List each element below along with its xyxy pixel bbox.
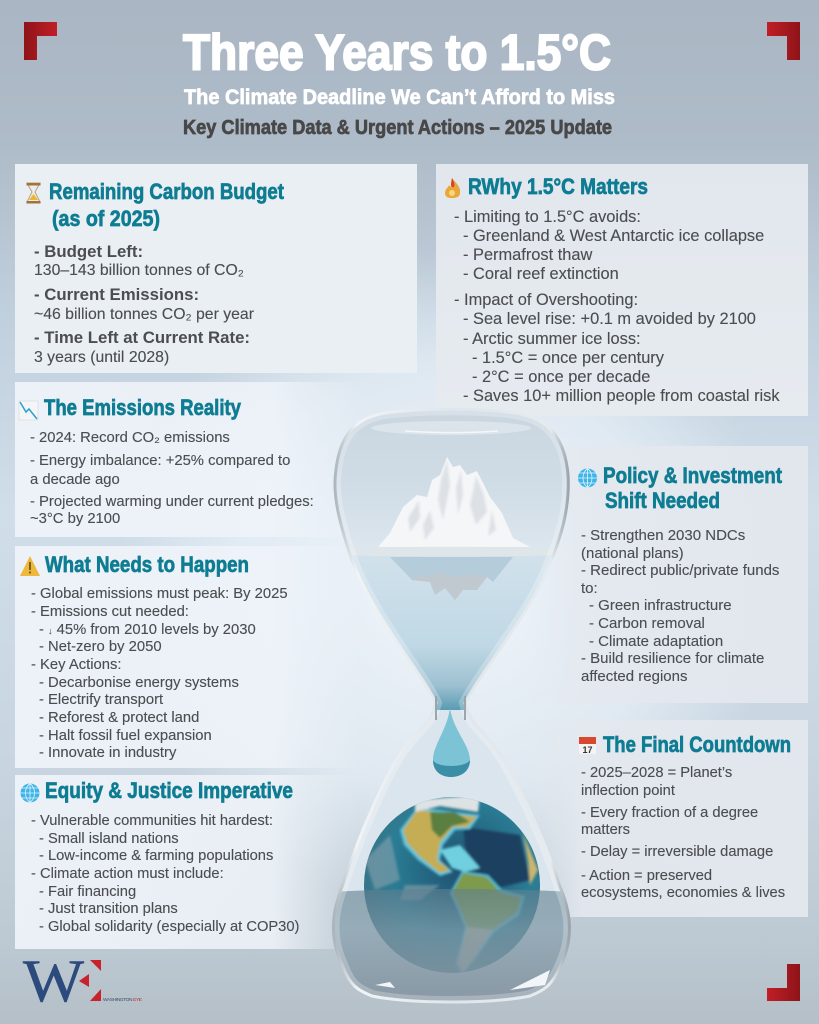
logo: Washington Eye: W — [23, 948, 84, 1014]
heading — [49, 179, 285, 231]
icon: falling chart — [19, 401, 38, 420]
icon: hourglass — [26, 183, 40, 204]
iceberg above water — [378, 457, 530, 547]
panel: why 1.5C matters — [436, 164, 808, 416]
body text — [30, 430, 314, 527]
body text: - Small island nations — [39, 831, 179, 847]
budget stats: 130–143 billion tonnes of CO₂ — [34, 262, 244, 279]
heading: Shift Needed — [605, 488, 720, 513]
body text — [31, 813, 299, 935]
heading: What Needs to Happen — [45, 552, 249, 577]
body text — [581, 527, 779, 685]
panel: final countdown — [525, 720, 808, 917]
icon: calendar: 17 — [582, 745, 593, 755]
heading: Policy & Investment — [603, 463, 783, 488]
body text: - 2024: Record CO₂ emissions — [30, 430, 230, 446]
body text: - Strengthen 2030 NDCs — [581, 527, 745, 544]
budget stats: ~46 billion tonnes CO₂ per year — [34, 306, 254, 323]
body text: - Emissions cut needed: — [31, 604, 189, 620]
body text: ecosystems, economies & lives — [581, 885, 785, 901]
body text: - Halt fossil fuel expansion — [39, 728, 212, 744]
budget stats: - Time Left at Current Rate: — [34, 328, 250, 347]
heading: RWhy 1.5°C Matters — [468, 174, 648, 199]
heading: (as of 2025) — [52, 206, 160, 231]
body text: - Saves 10+ million people from coastal risk — [463, 387, 780, 405]
body text: - Global solidarity (especially at COP30) — [39, 919, 299, 935]
body text: a decade ago — [30, 472, 120, 488]
body text: - Permafrost thaw — [463, 246, 593, 264]
body text: - 2°C = once per decade — [472, 368, 650, 386]
body text: - 2025–2028 = Planet’s — [581, 765, 732, 781]
body text: - Coral reef extinction — [463, 265, 619, 283]
body text: - Projected warming under current pledges: — [30, 494, 314, 510]
body text: - Innovate in industry — [39, 745, 177, 761]
body text: - ↓ 45% from 2010 levels by 2030 — [39, 622, 256, 638]
body text — [454, 208, 780, 405]
heading: Equity & Justice Imperative — [45, 778, 293, 803]
title: Three Years to 1.5°C — [183, 24, 611, 80]
glass wall thickness — [334, 409, 569, 1002]
body text: - Arctic summer ice loss: — [463, 330, 641, 348]
heading — [603, 463, 783, 513]
panel: remaining carbon budget — [15, 164, 417, 373]
body text: (national plans) — [581, 545, 684, 562]
logo: Washington Eye: WASHINGTON EYE — [103, 997, 142, 1003]
icon: globe — [20, 784, 40, 802]
body text: - Delay = irreversible damage — [581, 844, 773, 860]
body text: ~3°C by 2100 — [30, 511, 120, 527]
body text: - Just transition plans — [39, 901, 178, 917]
corner bracket: top left — [24, 22, 57, 60]
body text: to: — [581, 580, 598, 597]
budget stats: 3 years (until 2028) — [34, 349, 169, 366]
body text: - Low-income & farming populations — [39, 848, 273, 864]
panel: equity and justice — [15, 775, 360, 949]
body text: - 1.5°C = once per century — [472, 349, 665, 367]
glass outline — [334, 409, 569, 1002]
corner bracket: bottom right — [767, 964, 800, 1001]
glass body — [334, 409, 569, 1002]
logo: Washington Eye — [23, 948, 142, 1014]
body text: - Electrify transport — [39, 692, 163, 708]
corner bracket: top right — [767, 22, 800, 60]
lower water — [330, 889, 575, 1005]
iceberg underwater — [390, 557, 513, 600]
body text: - Redirect public/private funds — [581, 562, 779, 579]
body text: - Reforest & protect land — [39, 710, 199, 726]
body text: - Climate adaptation — [589, 633, 723, 650]
body text: - Green infrastructure — [589, 597, 732, 614]
panel: policy and investment — [525, 446, 808, 703]
falling drop — [433, 708, 470, 777]
budget stats: - Budget Left: — [34, 242, 143, 261]
budget stats: - Current Emissions: — [34, 285, 199, 304]
body text: - Limiting to 1.5°C avoids: — [454, 208, 641, 226]
budget stats — [34, 242, 254, 366]
body text — [31, 586, 288, 761]
body text: affected regions — [581, 668, 687, 685]
body text — [581, 765, 785, 901]
body text: - Build resilience for climate — [581, 650, 764, 667]
body text: - Energy imbalance: +25% compared to — [30, 453, 290, 469]
upper water — [355, 556, 548, 710]
heading: Remaining Carbon Budget — [49, 179, 285, 204]
title block — [183, 24, 615, 139]
subtitle: The Climate Deadline We Can’t Afford to Miss — [184, 86, 615, 109]
hourglass illustration — [330, 405, 575, 1005]
body text: - Key Actions: — [31, 657, 121, 673]
body text: - Every fraction of a degree — [581, 805, 758, 821]
body text: - Impact of Overshooting: — [454, 291, 638, 309]
body text: - Global emissions must peak: By 2025 — [31, 586, 288, 602]
body text: - Net-zero by 2050 — [39, 639, 162, 655]
heading: The Emissions Reality — [44, 395, 242, 420]
body text: - Action = preserved — [581, 868, 712, 884]
body text: - Carbon removal — [589, 615, 705, 632]
panel: emissions reality — [15, 382, 360, 537]
body text: - Sea level rise: +0.1 m avoided by 2100 — [463, 310, 756, 328]
body text: inflection point — [581, 783, 675, 799]
body text: matters — [581, 822, 630, 838]
body text: - Climate action must include: — [31, 866, 224, 882]
icon: calendar — [579, 737, 596, 755]
icon: globe — [578, 468, 597, 488]
panel: what needs to happen — [15, 546, 360, 768]
body text: - Greenland & West Antarctic ice collapse — [463, 227, 764, 245]
body text: - Vulnerable communities hit hardest: — [31, 813, 273, 829]
icon: fire — [445, 178, 460, 198]
update line: Key Climate Data & Urgent Actions – 2025 Update — [183, 117, 612, 139]
upper air — [336, 411, 566, 502]
earth — [360, 795, 545, 977]
body text: - Decarbonise energy systems — [39, 675, 239, 691]
body text: - Fair financing — [39, 884, 136, 900]
icon: warning — [20, 556, 40, 576]
water surface — [345, 547, 558, 556]
